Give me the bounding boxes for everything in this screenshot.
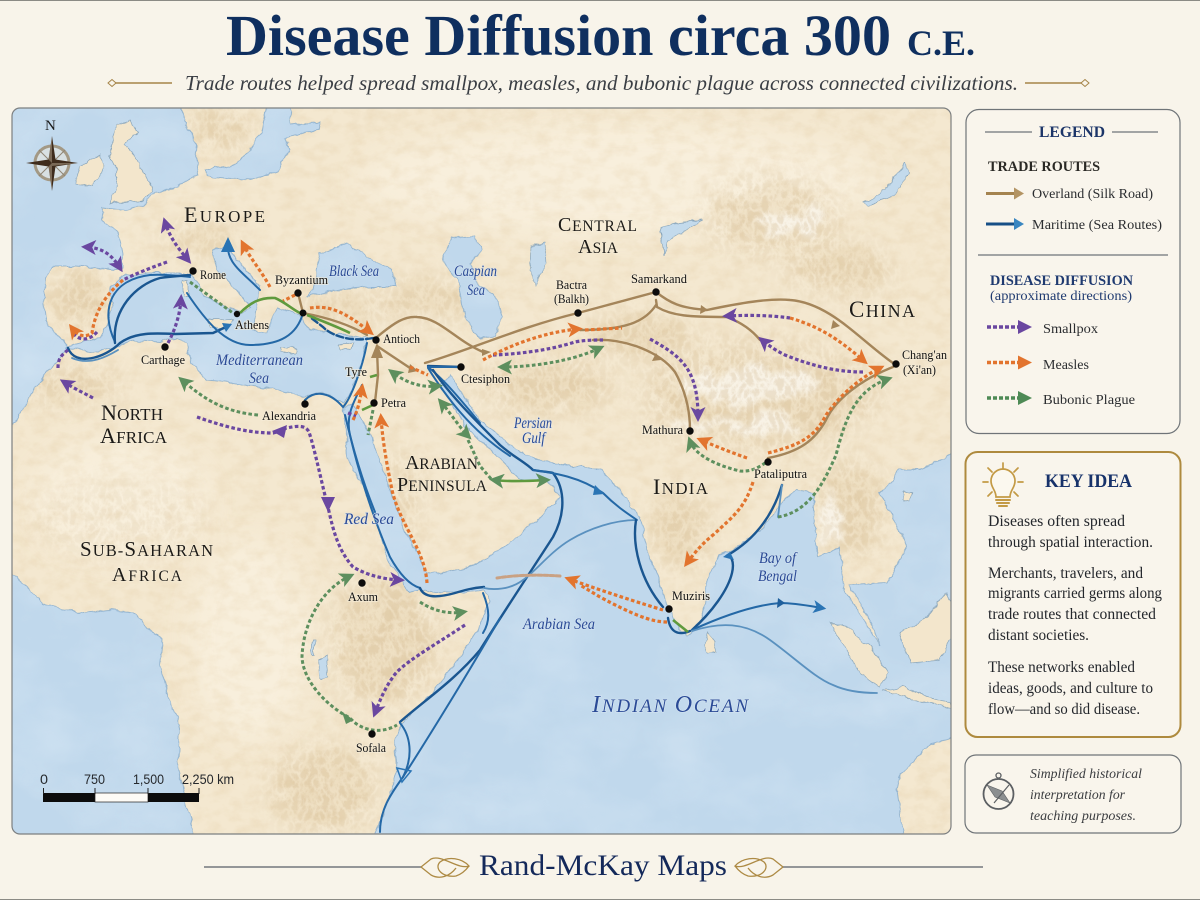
disease diffusion legend (987, 273, 1135, 408)
city labels: Chang'an (902, 348, 948, 362)
city labels: Pataliputra (754, 467, 807, 481)
region labels: CHINA (849, 297, 915, 322)
trade routes legend: TRADE ROUTES (988, 159, 1100, 175)
panel: legend (966, 110, 1180, 434)
land base with mountains (12, 108, 951, 834)
city labels: Axum (348, 590, 378, 604)
key idea text: trade routes that connected (988, 606, 1156, 623)
key idea text: Diseases often spread (988, 513, 1125, 530)
city labels: Byzantium (275, 273, 328, 287)
islands and lakes (75, 120, 955, 708)
overland trade routes (298, 292, 893, 458)
key idea text: flow—and so did disease. (988, 701, 1140, 718)
disease diffusion legend: DISEASE DIFFUSION (990, 273, 1134, 289)
icon: light bulb (983, 463, 1023, 506)
disease diffusion legend: (approximate directions) (990, 289, 1132, 304)
region labels: PENINSULA (397, 474, 488, 496)
note text (1030, 767, 1142, 824)
sea labels (215, 263, 798, 718)
region labels: EUROPE (184, 202, 265, 227)
city labels: Carthage (141, 353, 185, 367)
city labels: Muziris (672, 589, 710, 603)
region labels: INDIA (653, 474, 709, 499)
sea labels: Bengal (758, 568, 797, 585)
subtitle with ornaments: Trade routes helped spread smallpox, measles, and bubonic plague across connected civilizations. (185, 71, 1018, 95)
scale bar (40, 771, 234, 802)
city labels: Mathura (642, 423, 683, 437)
city labels: Alexandria (262, 409, 316, 423)
bubonic plague diffusion (182, 282, 888, 730)
disease diffusion legend: Measles (1043, 358, 1089, 373)
panel: note (965, 755, 1181, 833)
key idea text: through spatial interaction. (988, 534, 1153, 551)
city labels: Ctesiphon (461, 372, 511, 386)
city labels: Rome (200, 268, 226, 282)
key idea text (988, 513, 1162, 718)
sea labels: Mediterranean (215, 352, 303, 369)
trade routes legend: Overland (Silk Road) (1032, 187, 1153, 202)
key idea text: ideas, goods, and culture to (988, 680, 1153, 697)
maritime trade routes (68, 237, 877, 832)
sea labels: Sea (467, 282, 485, 299)
region labels (80, 202, 915, 586)
key idea heading: KEY IDEA (1045, 472, 1133, 492)
panel: map (0, 100, 965, 845)
sea labels: Caspian (454, 263, 497, 280)
city labels (141, 268, 948, 755)
city labels: Tyre (345, 365, 367, 379)
note text: interpretation for (1030, 788, 1126, 803)
city labels: Sofala (356, 741, 386, 755)
smallpox diffusion (58, 222, 863, 713)
key idea text: Merchants, travelers, and (988, 565, 1143, 582)
legend heading: LEGEND (1039, 124, 1105, 141)
scale bar: 1,500 (133, 771, 164, 787)
note text: teaching purposes. (1030, 809, 1136, 824)
region labels: AFRICA (112, 564, 183, 586)
measles diffusion (72, 244, 880, 622)
sea labels: Arabian Sea (522, 616, 595, 633)
sea labels: Sea (249, 370, 269, 387)
city labels: Athens (235, 318, 269, 332)
scale bar: 0 (40, 771, 48, 787)
sea labels: Red Sea (343, 511, 394, 528)
city labels: (Balkh) (554, 292, 589, 306)
sea labels: Bay of (759, 550, 798, 567)
icon: compass (984, 773, 1014, 809)
seas and oceans (0, 100, 965, 845)
city labels: Petra (381, 396, 406, 410)
trade routes legend (986, 159, 1162, 233)
region labels: ASIA (578, 236, 619, 258)
region labels: NORTH (101, 400, 163, 425)
sea labels: Persian (513, 415, 552, 432)
note text: Simplified historical (1030, 767, 1142, 782)
panel: key idea (966, 452, 1180, 737)
key idea text: migrants carried germs along (988, 585, 1162, 602)
title: C.E. (907, 23, 975, 63)
sea labels: INDIAN OCEAN (591, 692, 749, 718)
footer (204, 849, 983, 882)
title: Disease Diffusion circa 300 (226, 3, 891, 68)
trade routes legend: Maritime (Sea Routes) (1032, 218, 1162, 233)
disease diffusion legend: Smallpox (1043, 322, 1098, 337)
city markers (161, 267, 900, 738)
scale bar: 2,250 km (182, 771, 234, 787)
key idea text: distant societies. (988, 627, 1089, 644)
key idea text: These networks enabled (988, 659, 1135, 676)
city labels: Samarkand (631, 272, 688, 286)
city labels: Antioch (383, 332, 421, 346)
region labels: AFRICA (100, 423, 168, 448)
sea labels: Black Sea (329, 263, 379, 280)
scale bar: 750 (84, 771, 105, 787)
disease diffusion legend: Bubonic Plague (1043, 393, 1135, 408)
region labels: ARABIAN (405, 452, 478, 474)
sea labels: Gulf (522, 430, 547, 447)
region labels: CENTRAL (558, 214, 637, 236)
region labels: SUB-SAHARAN (80, 537, 213, 561)
footer: Rand-McKay Maps (479, 849, 727, 882)
city labels: Bactra (556, 278, 587, 292)
map border (12, 108, 951, 834)
city labels: (Xi'an) (903, 363, 936, 377)
icon: compass rose (26, 118, 78, 191)
icon: compass rose: N (45, 118, 56, 134)
